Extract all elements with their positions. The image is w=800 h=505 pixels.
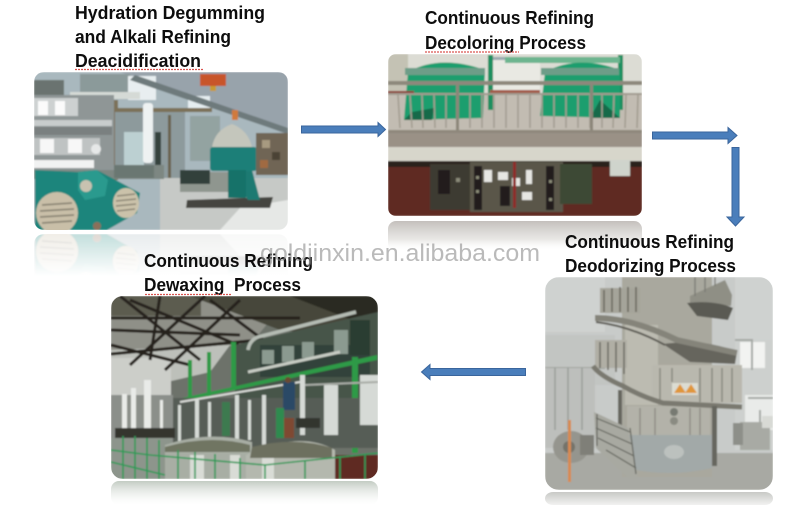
title: decoloring process: Decoloring Process: [425, 33, 586, 53]
man: [283, 382, 295, 410]
title: hydration degumming: and Alkali Refining: [75, 27, 231, 47]
red band: [388, 91, 414, 95]
stairs: [594, 412, 628, 454]
title: hydration degumming: Deacidification: [75, 51, 201, 71]
green railing: [111, 436, 378, 479]
title: hydration degumming: [75, 3, 265, 71]
title: deodorizing process: Continuous Refining: [565, 232, 734, 252]
left columns: [111, 395, 173, 445]
photo 4: deodorizing tower: [545, 277, 773, 490]
plants: [256, 133, 288, 175]
right tank: [540, 62, 620, 118]
title: decoloring process: [425, 8, 594, 53]
upper spiral: [663, 342, 737, 364]
title: dewaxing process: [144, 251, 313, 295]
pump: [553, 431, 589, 463]
mid railing: [595, 340, 627, 368]
arrow: step 1 to step 2: [302, 122, 386, 136]
right upper structure: [234, 312, 378, 398]
reflection of photo 4: [545, 492, 773, 505]
title: deodorizing process: Deodorizing Process: [565, 256, 736, 276]
tanks: [111, 444, 166, 479]
title: dewaxing process: Continuous Refining: [144, 251, 313, 271]
mid silver piping: [170, 398, 378, 448]
green frame: [184, 354, 378, 398]
teal machine: [35, 170, 140, 230]
lower red floor & pipes: [388, 161, 642, 216]
title: hydration degumming: Hydration Degumming: [75, 3, 265, 23]
person and equipment: [740, 422, 770, 450]
upper railing: [600, 288, 623, 314]
title: deodorizing process: [565, 232, 736, 276]
lower spiral: [593, 366, 742, 407]
left tank: [404, 62, 485, 120]
arrow: step 2 continuing right: [652, 128, 737, 144]
reflection of photo 1: [34, 234, 272, 270]
reflection of photo 2: [388, 221, 642, 251]
arrow: step 3 to step 4: [422, 364, 526, 380]
railing: [388, 81, 642, 85]
arrow: step 2 down to step 3: [727, 148, 744, 226]
silver tank: [34, 95, 114, 170]
title: dewaxing process: Dewaxing Process: [144, 275, 301, 295]
tower column: [621, 277, 713, 436]
warning signs: [672, 383, 698, 395]
reflection of photo 3: [111, 481, 378, 505]
centrifuge: [186, 197, 273, 208]
watermark: goldjinxin.en.alibaba.com: [260, 240, 540, 267]
photo 1: hydration degumming centrifuge: [34, 72, 288, 234]
photo 2: decoloring filter tanks: [388, 54, 642, 216]
title: decoloring process: Continuous Refining: [425, 8, 594, 28]
photo 3: dewaxing plant: [111, 296, 378, 479]
